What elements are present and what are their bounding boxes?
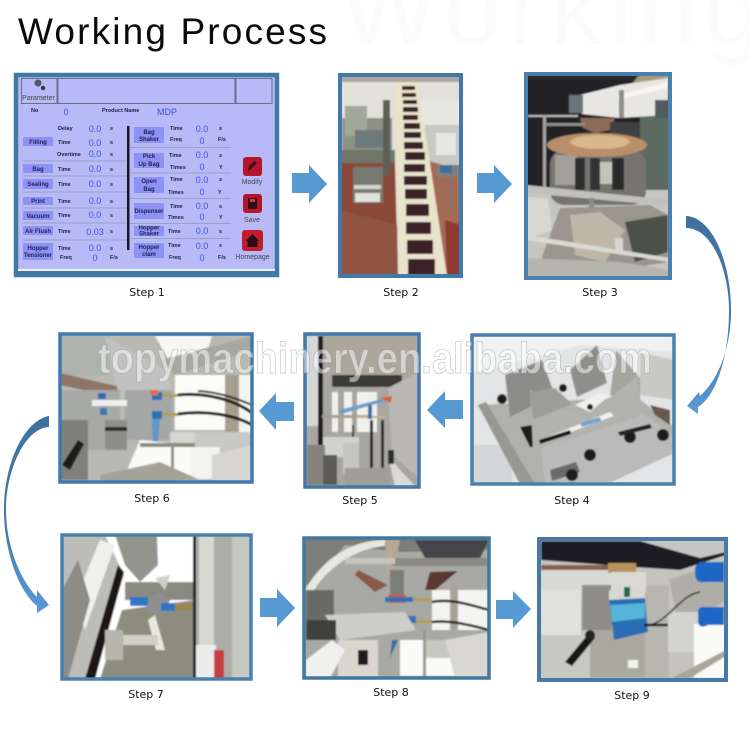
panel: step 1 control screen: s [110,229,113,235]
panel: step 1 control screen: 0 [199,212,205,222]
panel: step 1 control screen: 0.0 [196,150,208,160]
panel: step 3 multihead weigher photo [526,74,670,280]
panel: step 1 control screen: 0 [199,187,205,197]
label: step 9: Step 9 [614,689,650,702]
panel: step 1 control screen: s [219,243,222,249]
panel: step 1 control screen: Hopper [138,245,160,251]
label: step 4: Step 4 [554,494,590,507]
panel: step 1 control screen: Time [58,229,71,235]
panel: step 1 control screen: Hopper [28,246,49,252]
arrow: step 4 to 5 [427,391,463,428]
label: step 3: Step 3 [582,286,618,299]
panel: step 1 control screen: s [110,140,113,146]
panel: step 1 control screen: 0.0 [196,201,208,211]
panel: step 1 control screen: 0.0 [196,226,208,236]
panel: step 1 control screen: 0.0 [89,243,101,253]
panel: step 6 machine photo [60,334,252,482]
panel: step 1 control screen: Y [218,190,222,196]
panel: step 1 control screen: s [110,199,113,205]
panel: step 1 control screen: Overtime [57,152,81,158]
panel: step 2 conveyor photo [340,75,461,276]
panel: step 1 control screen: s [110,213,113,219]
panel: step 1 control screen: 0 [199,136,205,146]
arrow: step 8 to 9 [496,591,531,628]
panel: step 1 control screen: Bag [143,187,155,193]
panel: step 1 control screen: Time [58,167,71,173]
panel: step 1 control screen: Sealing [27,182,49,188]
panel: step 1 control screen: 0.0 [89,196,101,206]
panel: step 1 control screen: 0.0 [89,124,101,134]
panel: step 1 control screen: s [110,126,113,132]
panel: step 1 control screen: Pick [143,154,156,160]
panel: step 1 control screen: s [110,152,113,158]
panel: step 1 control screen: 0.0 [89,210,101,220]
panel: step 1 control screen: 0 [199,253,205,263]
panel: step 1 control screen: Hopper [138,226,160,232]
panel: step 4 adjustable plates photo [472,335,674,484]
panel: step 1 control screen: Time [170,126,183,132]
panel: step 1 control screen: Product Name [102,108,139,114]
watermark: site address: topymachinery.en.alibaba.com [98,334,652,383]
panel: step 1 control screen: MDP [157,107,177,117]
label: step 7: Step 7 [128,688,164,701]
title: Working Process [18,11,327,52]
panel: step 1 control screen: Freq [60,255,72,261]
panel: step 1 control screen: Time [168,243,181,249]
panel: step 1 control screen: Time [170,177,183,183]
arrow: step 7 to 8 [260,589,295,627]
panel: step 1 control screen: Times [168,215,184,221]
panel: step 1 control screen: 0.0 [89,179,101,189]
label: step 2: Step 2 [383,286,419,299]
panel: step 1 control screen: 0.0 [196,175,208,185]
panel: step 1 control screen: Air Flush [25,229,51,235]
panel: step 1 control screen: F/s [218,255,226,261]
panel: step 1 control screen: Time [168,229,181,235]
panel: step 1 control screen: clam [142,252,156,258]
panel: step 1 control screen: s [219,229,222,235]
panel: step 1 control screen: 0 [199,162,205,172]
panel: step 1 control screen: Up Bag [138,162,160,168]
panel: step 1 control screen: Time [170,204,183,210]
panel: step 1 control screen: Time [58,140,71,146]
panel: step 5 filling nozzle photo [305,334,419,487]
panel: step 1 control screen: Bag [143,130,155,136]
arrow: step 2 to 3 [477,165,512,203]
panel: step 1 control screen: Parameter [22,95,56,102]
panel: step 1 control screen: Homepage [235,254,270,261]
panel: step 1 control screen: Bag [32,167,44,173]
panel: step 1 control screen: Times [170,165,186,171]
panel: step 8 sealing photo [304,538,489,678]
arrow: curved step 3 to 4 [686,216,731,414]
panel: step 1 control screen: Shaker [139,137,160,143]
panel: step 1 control screen: 0.0 [89,149,101,159]
panel: step 1 control screen: F/s [110,255,118,261]
panel: step 1 control screen: s [219,204,222,210]
panel: step 1 control screen: Time [58,199,71,205]
panel: step 1 control screen: Time [169,153,182,159]
panel: step 1 control screen: Filling [29,140,47,146]
panel: step 1 control screen: Shaker [139,232,160,238]
panel: step 1 control screen [16,75,277,275]
arrow: curved step 6 to 7 [4,416,49,613]
panel: step 1 control screen: Freq [170,137,182,143]
panel: step 1 control screen: Vacuum [26,214,50,220]
panel: step 1 control screen: 0.0 [196,124,208,134]
panel: step 1 control screen: Dispenser [134,209,164,215]
label: step 5: Step 5 [342,494,378,507]
panel: step 1 control screen: Times [168,190,184,196]
label: step 6: Step 6 [134,492,170,505]
panel: step 1 control screen: 0.03 [86,227,104,237]
panel: step 1 control screen: Y [219,165,223,171]
label: step 1: Step 1 [129,286,165,299]
panel: step 1 control screen: s [219,126,222,132]
panel: step 1 control screen: Y [219,215,223,221]
panel: step 1 control screen: s [110,246,113,252]
panel: step 1 control screen: F/s [218,137,226,143]
label: step 8: Step 8 [373,686,409,699]
panel: step 1 control screen: 0 [92,253,98,263]
arrow: step 1 to 2 [292,165,327,203]
panel: step 1 control screen: 0.0 [196,241,208,251]
panel: step 1 control screen: Tensioner [24,253,53,259]
panel: step 1 control screen: s [219,177,222,183]
panel: step 1 control screen: Delay [58,126,74,132]
panel: step 1 control screen: Time [58,213,71,219]
panel: step 1 control screen: Time [58,182,71,188]
panel: step 1 control screen: s [110,182,113,188]
panel: step 1 control screen: 0 [63,107,69,117]
panel: step 7 forming tube photo [62,535,251,679]
panel: step 1 control screen: Time [58,246,71,252]
panel: step 1 control screen: 0.0 [89,164,101,174]
panel: step 1 control screen: Modify [242,179,263,186]
panel: step 1 control screen: s [110,167,113,173]
panel: step 1 control screen: No [31,108,39,114]
panel: step 1 control screen: Print [31,199,45,205]
panel: step 1 control screen: s [219,153,222,159]
panel: step 1 control screen: Freq [169,255,181,261]
arrow: step 5 to 6 [259,393,294,430]
panel: step 1 control screen: Save [244,217,260,224]
panel: step 9 finished pouch photo [539,539,726,680]
panel: step 1 control screen: Open [141,179,157,185]
panel: step 1 control screen: 0.0 [89,138,101,148]
